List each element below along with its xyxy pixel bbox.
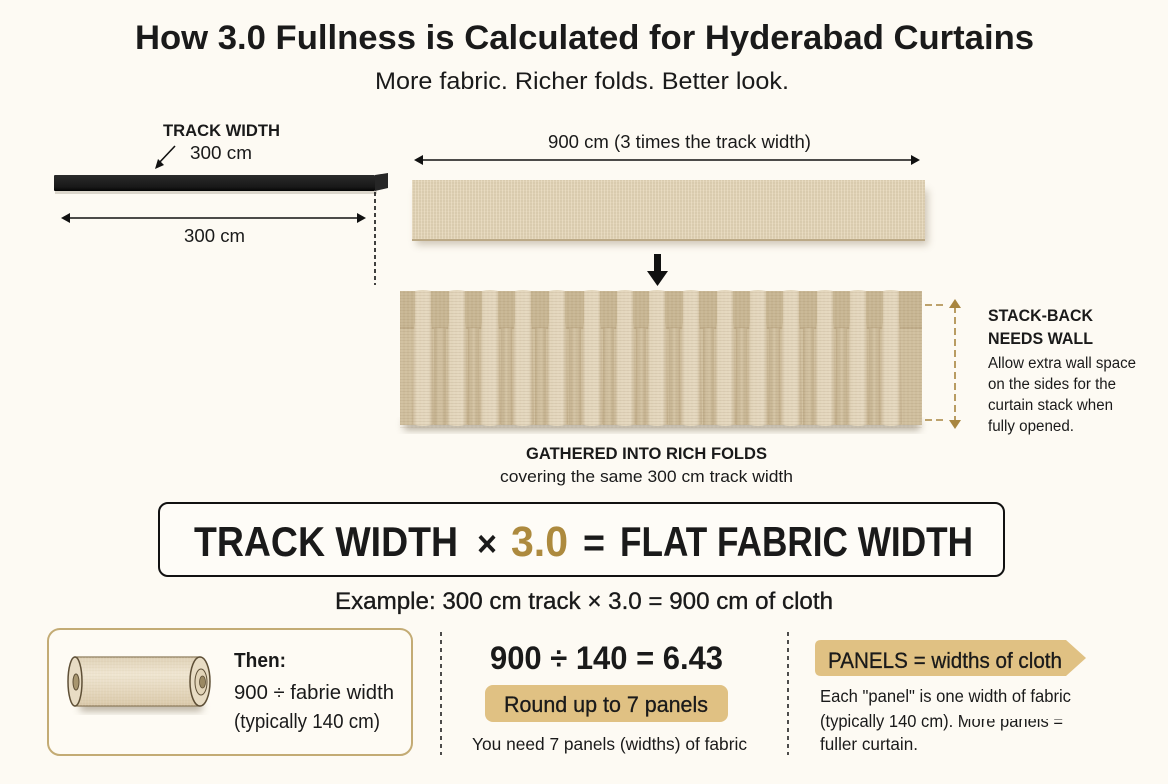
- callout: stack-back: [988, 306, 1136, 435]
- dashed guide line: [374, 192, 376, 285]
- example line: Example: 300 cm track × 3.0 = 900 cm of cloth: [335, 588, 833, 615]
- icon: curtain track rail: [54, 173, 388, 194]
- panel: panel calculation: [472, 640, 747, 754]
- panel: then fabric width: [48, 629, 412, 755]
- definition text: (typically 140 cm). More panels =: [820, 711, 1063, 731]
- callout: stack-back: fully opened.: [988, 418, 1074, 435]
- callout: stack-back: on the sides for the: [988, 376, 1116, 393]
- gathered sub-caption: covering the same 300 cm track width: [500, 467, 793, 486]
- flat fabric swatch: [412, 180, 928, 245]
- callout: stack-back: curtain stack when: [988, 397, 1113, 414]
- then text: (typically 140 cm): [234, 711, 380, 733]
- gathered curtain illustration: [400, 290, 922, 430]
- subtitle: More fabric. Richer folds. Better look.: [375, 68, 789, 95]
- formula box: [159, 503, 1004, 576]
- then text: 900 ÷ fabrie width: [234, 682, 394, 704]
- fabric width label: 900 cm (3 times the track width): [548, 132, 811, 152]
- callout: stack-back: STACK-BACK: [988, 306, 1094, 325]
- panel: track width diagram: [54, 121, 388, 285]
- formula box: ×: [477, 523, 497, 564]
- arrow: 900 cm dimension: [414, 155, 920, 165]
- arrow: curtain height dashed: [925, 299, 961, 429]
- track width label: TRACK WIDTH: [163, 121, 280, 140]
- result note: You need 7 panels (widths) of fabric: [472, 734, 747, 754]
- formula box: =: [583, 521, 605, 565]
- formula box: 3.0: [511, 518, 568, 566]
- formula box: FLAT FABRIC WIDTH: [620, 518, 973, 565]
- gathered caption: GATHERED INTO RICH FOLDS: [526, 444, 767, 463]
- then text: [234, 650, 394, 733]
- definition text: fuller curtain.: [820, 734, 918, 754]
- dimension label: 300 cm: [184, 226, 245, 246]
- formula box: TRACK WIDTH: [194, 518, 458, 565]
- arrow: 300 cm dimension: [61, 213, 366, 223]
- round-up pill: [485, 685, 728, 722]
- title: How 3.0 Fullness is Calculated for Hyderabad Curtains: [135, 19, 1034, 57]
- panel: panels definition: [815, 640, 1086, 754]
- definition text: [820, 686, 1071, 754]
- tag: panels: [815, 640, 1086, 676]
- panel: flat fabric: [412, 132, 928, 286]
- round-up pill: Round up to 7 panels: [504, 692, 708, 717]
- definition text: Each "panel" is one width of fabric: [820, 686, 1071, 706]
- arrow: pointer to track: [155, 146, 175, 169]
- panel: gathered curtain: [400, 290, 961, 486]
- callout: stack-back: Allow extra wall space: [988, 355, 1136, 372]
- tag: panels: PANELS = widths of cloth: [828, 648, 1062, 673]
- arrow: down to gathered curtain: [647, 254, 668, 286]
- icon: fabric roll: [68, 657, 210, 711]
- track width value: 300 cm: [190, 143, 252, 163]
- calculation: 900 ÷ 140 = 6.43: [490, 640, 723, 676]
- then text: Then:: [234, 650, 286, 672]
- callout: stack-back: NEEDS WALL: [988, 329, 1093, 348]
